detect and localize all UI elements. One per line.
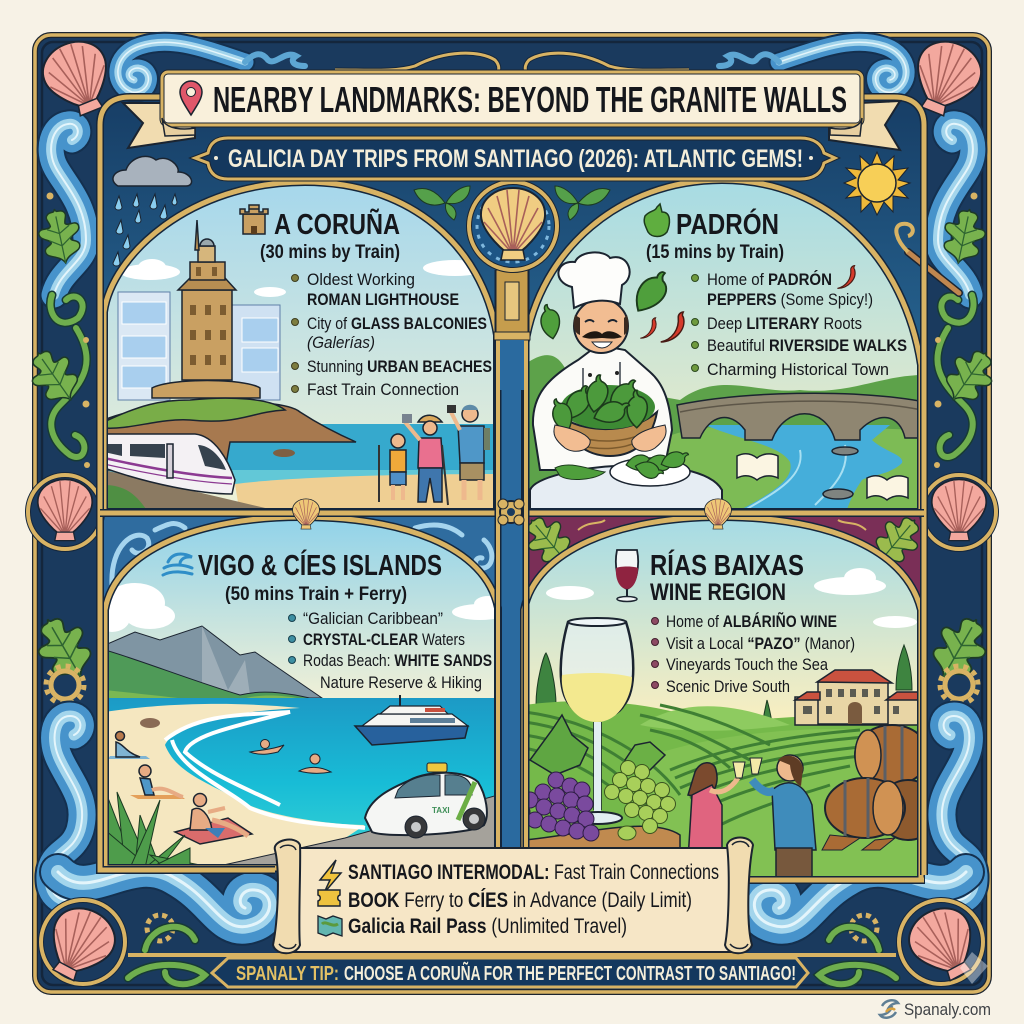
corner medallion xyxy=(36,898,125,990)
panel B heading xyxy=(644,204,784,263)
leaf sprays xyxy=(414,186,610,220)
books xyxy=(737,454,908,500)
gear xyxy=(46,666,84,704)
glass buildings xyxy=(118,292,280,400)
tracks and grass xyxy=(108,471,265,508)
panel B bullets: Beautiful RIVERSIDE WALKS xyxy=(707,336,907,355)
panel: A Coruna xyxy=(100,180,500,515)
agave plant xyxy=(109,792,198,864)
sky xyxy=(530,184,917,400)
panel C bullets xyxy=(288,609,492,692)
sky xyxy=(100,180,500,515)
pilgrim staff xyxy=(896,224,959,293)
panel D bullets: Visit a Local “PAZO” (Manor) xyxy=(666,634,855,653)
sand xyxy=(235,474,493,508)
train xyxy=(104,434,235,494)
bottom-right spandrel ornaments xyxy=(516,507,930,573)
vineyard hills xyxy=(524,701,921,880)
panel B bullets xyxy=(692,266,907,379)
scroll panel: BOOK Ferry to CÍES in Advance (Daily Limit) xyxy=(348,889,692,912)
floating peppers xyxy=(540,271,668,340)
oak leaves xyxy=(20,205,102,689)
panel D bullets: Vineyards Touch the Sea xyxy=(666,655,828,674)
bottom green curl and gear xyxy=(128,915,205,984)
taxi xyxy=(365,763,487,838)
grape leaves xyxy=(530,715,588,775)
tip band: CHOOSE A CORUÑA FOR THE PERFECT CONTRAST TO SANTIAGO! xyxy=(344,962,796,985)
panel C bullets: CRYSTAL-CLEAR Waters xyxy=(303,630,465,649)
center shell medallion xyxy=(469,182,557,270)
scroll panel: SANTIAGO INTERMODAL: Fast Train Connections xyxy=(348,861,719,884)
panel A bullets: Oldest Working xyxy=(307,270,415,289)
scroll panel xyxy=(273,838,753,953)
woman xyxy=(688,763,717,798)
icon: map pin xyxy=(180,81,202,115)
panel: Rias Baixas xyxy=(514,515,938,880)
panel A bullets: City of GLASS BALCONIES xyxy=(307,314,487,333)
panel D bullets xyxy=(652,611,855,696)
Spanaly logo: Spanaly.com xyxy=(904,1000,991,1019)
subtitle banner: GALICIA DAY TRIPS FROM SANTIAGO (2026): ATLANTIC GEMS! xyxy=(228,145,803,173)
panel A heading: A CORUÑA xyxy=(274,207,400,241)
green grapes xyxy=(604,760,676,840)
stone bridge xyxy=(677,393,925,440)
man xyxy=(447,405,490,500)
panel C heading: (50 mins Train + Ferry) xyxy=(225,584,407,605)
sun xyxy=(844,152,910,215)
panel B bullets: Home of PADRÓN xyxy=(707,270,832,289)
center knot xyxy=(498,499,524,525)
cypresses xyxy=(536,645,912,745)
mountains xyxy=(105,626,322,698)
panel spandrels xyxy=(100,100,924,880)
child xyxy=(379,434,406,502)
decorative left border, waves shells vines xyxy=(20,33,499,990)
panel A bullets: (Galerías) xyxy=(307,333,375,352)
icon: ticket xyxy=(318,890,340,906)
man xyxy=(777,755,803,781)
panel B bullets: Deep LITERARY Roots xyxy=(707,314,862,333)
sky xyxy=(520,515,925,725)
clouds xyxy=(94,583,508,632)
tip band xyxy=(128,955,896,987)
taxi: TAXI xyxy=(432,806,450,815)
panel A bullets: ROMAN LIGHTHOUSE xyxy=(307,290,459,309)
icon: lightning bolt xyxy=(320,860,341,893)
peppers pile xyxy=(561,385,655,429)
couple xyxy=(688,755,816,878)
subtitle banner xyxy=(195,138,835,179)
panel C bullets: “Galician Caribbean” xyxy=(303,609,443,628)
panel D heading: WINE REGION xyxy=(650,579,786,606)
headland xyxy=(104,398,356,470)
tip band: SPANALY TIP: xyxy=(236,963,339,985)
panel B bullets: PEPPERS (Some Spicy!) xyxy=(707,290,873,309)
wine glass xyxy=(561,618,633,824)
basket xyxy=(563,412,657,456)
lighthouse tower xyxy=(152,220,260,398)
swimmers xyxy=(250,740,331,773)
clouds xyxy=(546,568,917,628)
sea xyxy=(109,698,494,837)
gold arches and dividers xyxy=(100,97,924,880)
hat xyxy=(558,252,630,308)
panel C heading xyxy=(163,548,442,605)
panel D heading xyxy=(616,548,804,606)
sky xyxy=(109,521,494,698)
woman xyxy=(402,414,448,505)
trees and hills xyxy=(530,355,917,489)
green vine xyxy=(50,295,87,457)
panel D bullets: Home of ALBÁRIÑO WINE xyxy=(666,611,837,631)
hands xyxy=(554,425,590,451)
panel D bullets: Scenic Drive South xyxy=(666,677,790,696)
face xyxy=(574,299,628,353)
road xyxy=(226,796,494,864)
corner shell xyxy=(35,33,121,123)
table top xyxy=(524,826,680,880)
panel A heading: (30 mins by Train) xyxy=(260,242,400,263)
scroll panel: Galicia Rail Pass (Unlimited Travel) xyxy=(348,915,627,938)
raised glasses xyxy=(733,758,762,778)
mid side medallion xyxy=(28,475,102,549)
purple grapes xyxy=(514,772,599,841)
title ribbon tails xyxy=(123,101,900,150)
upper left wave xyxy=(51,124,86,295)
table xyxy=(530,451,723,508)
top wave xyxy=(118,42,305,92)
panel C bullets: Rodas Beach: WHITE SANDS xyxy=(303,651,492,670)
sunbathers xyxy=(108,718,252,844)
panel A bullets: Fast Train Connection xyxy=(307,380,459,399)
icon: red wine glass xyxy=(616,550,638,602)
gold top scroll xyxy=(335,53,499,76)
lower left wave xyxy=(50,716,82,901)
hikers xyxy=(379,405,490,505)
gold dots xyxy=(46,192,208,894)
ferry xyxy=(355,695,468,745)
icon: green pepper xyxy=(644,204,669,236)
center column capital xyxy=(494,270,530,390)
panel A heading xyxy=(240,205,400,263)
panel: Vigo and Cies Islands xyxy=(94,515,508,868)
clouds xyxy=(120,259,487,297)
panel: Padron xyxy=(520,178,925,518)
panel B heading: (15 mins by Train) xyxy=(646,242,784,263)
panel D heading: RÍAS BAIXAS xyxy=(650,548,804,582)
icon: wave xyxy=(163,554,192,575)
beach xyxy=(105,704,365,868)
panel C bullets: Nature Reserve & Hiking xyxy=(320,673,482,692)
manor xyxy=(795,670,925,725)
watermark diamond xyxy=(960,952,988,984)
title banner xyxy=(162,72,862,136)
bottom wave xyxy=(58,870,270,927)
sea xyxy=(228,424,493,470)
panel C heading: VIGO & CÍES ISLANDS xyxy=(198,548,442,582)
small divider shells xyxy=(293,499,731,529)
barrels xyxy=(822,725,938,850)
decorative right border, mirrored xyxy=(525,33,1004,990)
bottom-left spandrel swirls xyxy=(112,524,492,585)
coat xyxy=(533,345,672,470)
panel A bullets: Stunning URBAN BEACHES xyxy=(307,357,492,376)
rain cloud xyxy=(113,156,192,266)
icon: castle xyxy=(240,205,268,234)
chef xyxy=(533,252,672,470)
panel B bullets: Charming Historical Town xyxy=(707,360,889,379)
icon: map xyxy=(318,916,342,936)
panel A bullets xyxy=(292,270,492,399)
river xyxy=(705,425,902,515)
panel B heading: PADRÓN xyxy=(676,207,779,241)
